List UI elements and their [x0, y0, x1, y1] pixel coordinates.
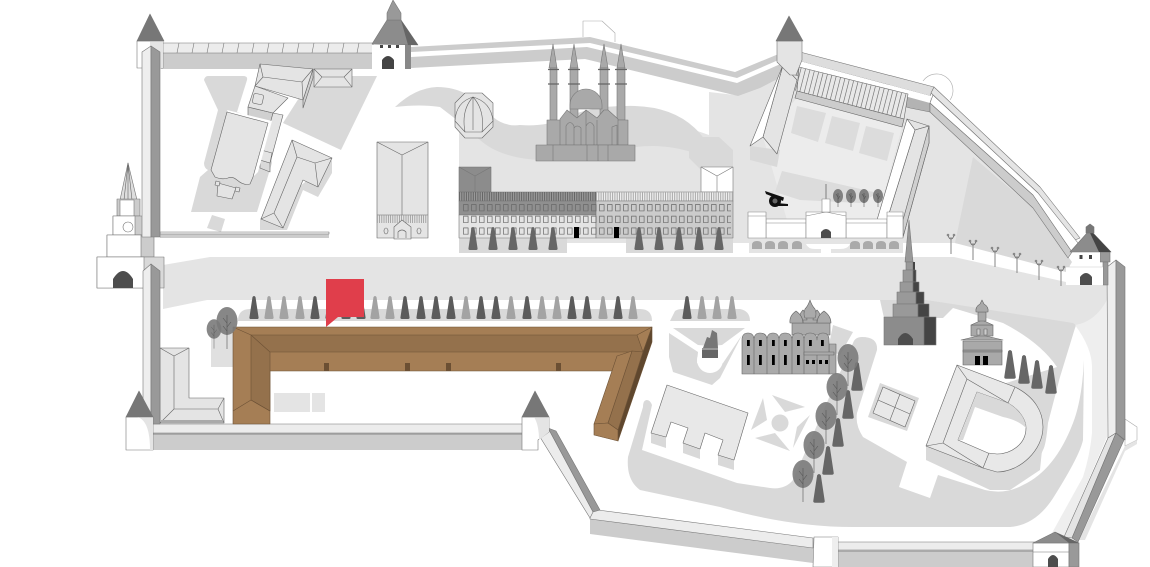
- mosque dome: [570, 89, 602, 109]
- ground: small lawn patch: [207, 215, 225, 232]
- west wall upper: [142, 46, 160, 237]
- lamp posts: [947, 234, 1065, 286]
- east wall: [1064, 260, 1137, 542]
- alley of trees: [207, 296, 737, 349]
- north-west corner tower: [137, 14, 164, 68]
- ground: gate bed paths: [806, 244, 850, 253]
- building: manege with hip roof: [377, 142, 428, 239]
- yard trees: [833, 189, 883, 207]
- round bastion outline: [923, 74, 953, 100]
- ground: alley bed right: [670, 309, 750, 321]
- gostiny dvor building: [459, 167, 733, 250]
- ground: light strip along east wall: [1052, 285, 1107, 537]
- ground: mosque alley beds: [459, 238, 733, 253]
- west wall lower: [143, 264, 160, 430]
- ground: south-eastern garden: [628, 337, 1084, 527]
- ground: lawn behind governor palace: [283, 76, 377, 150]
- ground: bed under left trees: [211, 330, 233, 367]
- main wing roof: [233, 327, 652, 424]
- building: d-shaped school: [926, 365, 1043, 490]
- arsenal complex: [748, 65, 929, 249]
- arcade roof: [795, 67, 908, 127]
- north-east wall long segment: [930, 87, 1080, 258]
- brown highlighted building: [233, 327, 652, 441]
- ground: alley bed left: [238, 309, 652, 321]
- light conical trees: [264, 296, 737, 319]
- outline behind north wall: [583, 21, 615, 42]
- north-east corner tower: [776, 16, 803, 75]
- ground: wave shaped lawn: [395, 87, 705, 160]
- side rectangles: [274, 393, 325, 412]
- garden conical trees: [813, 362, 863, 503]
- roof dark slope: [251, 335, 643, 411]
- south-west diagonal wall: [540, 428, 813, 563]
- south gate tower: [813, 537, 838, 567]
- syuyumbike tower: [884, 220, 936, 345]
- south wall: [837, 542, 1035, 567]
- south-east tower: [1033, 532, 1079, 567]
- building: palace complex: [248, 64, 313, 172]
- dark conical trees: [249, 296, 692, 319]
- ground: north-east triangle: [955, 157, 1072, 272]
- west-south wall: [148, 424, 524, 450]
- colonnade: [459, 192, 733, 201]
- facade: [459, 201, 733, 238]
- gate bushes: [752, 241, 899, 249]
- garden round trees: [792, 344, 858, 502]
- thin garden wall: [160, 232, 329, 238]
- spasskaya gate tower: [97, 163, 164, 288]
- roof hip lines: [233, 327, 652, 411]
- church conical trees: [1004, 350, 1057, 394]
- kul sharif mosque: [536, 44, 635, 161]
- ground: lawn around syuyumbike tower and church: [880, 300, 1076, 483]
- south middle tower: [522, 391, 549, 450]
- facade trees: [468, 227, 724, 250]
- north gate tower: [372, 0, 418, 69]
- mosque body: [547, 110, 628, 145]
- ground: annunciation gate bed: [749, 238, 903, 253]
- building: palace church: [211, 110, 272, 199]
- buildings north-west: [160, 64, 493, 423]
- ground: yard inside arsenal: [763, 98, 902, 220]
- wing roof: [594, 327, 652, 441]
- annunciation gate wall: [748, 184, 903, 238]
- monument: [697, 330, 723, 373]
- building: cadet school: [651, 385, 748, 470]
- ground: patch in front of the cathedral: [828, 325, 853, 355]
- mosque base: [536, 145, 635, 161]
- ground: monument lawn: [669, 328, 745, 385]
- ground: northern yard: [459, 60, 1072, 270]
- icon: red map flag: [326, 279, 364, 327]
- ground: star shaped plaza: [751, 395, 810, 451]
- building: L-shaped roof: [260, 140, 332, 230]
- south-east buildings: [651, 300, 1057, 503]
- south-west tower: [126, 391, 153, 450]
- north wall: [411, 37, 785, 96]
- ground: main road: [163, 257, 1107, 325]
- mosque minarets: [548, 44, 627, 120]
- small square pavilion: [868, 383, 919, 431]
- right block: [701, 167, 733, 192]
- cathedral of the annunciation: [742, 300, 836, 374]
- ground: octagon lawn: [689, 137, 733, 170]
- ground: yard squares: [775, 106, 894, 203]
- east wing: [877, 119, 929, 237]
- ground: light zones and roads: [163, 60, 1107, 537]
- small doors: [324, 363, 561, 371]
- garden trees: [792, 344, 863, 503]
- west wing: [750, 65, 797, 167]
- tainitskaya tower: [1066, 224, 1111, 285]
- building: gazebo: [455, 93, 493, 138]
- left block: [459, 167, 491, 192]
- north-west wall: [161, 43, 373, 69]
- church: [961, 300, 1003, 365]
- north-east wall first segment: [795, 52, 934, 112]
- building: left corner L: [160, 348, 224, 423]
- icon: cannon: [765, 191, 788, 207]
- building: small hip roof: [314, 69, 352, 94]
- left round trees: [207, 307, 238, 349]
- ground: lawn around palace church: [191, 76, 272, 212]
